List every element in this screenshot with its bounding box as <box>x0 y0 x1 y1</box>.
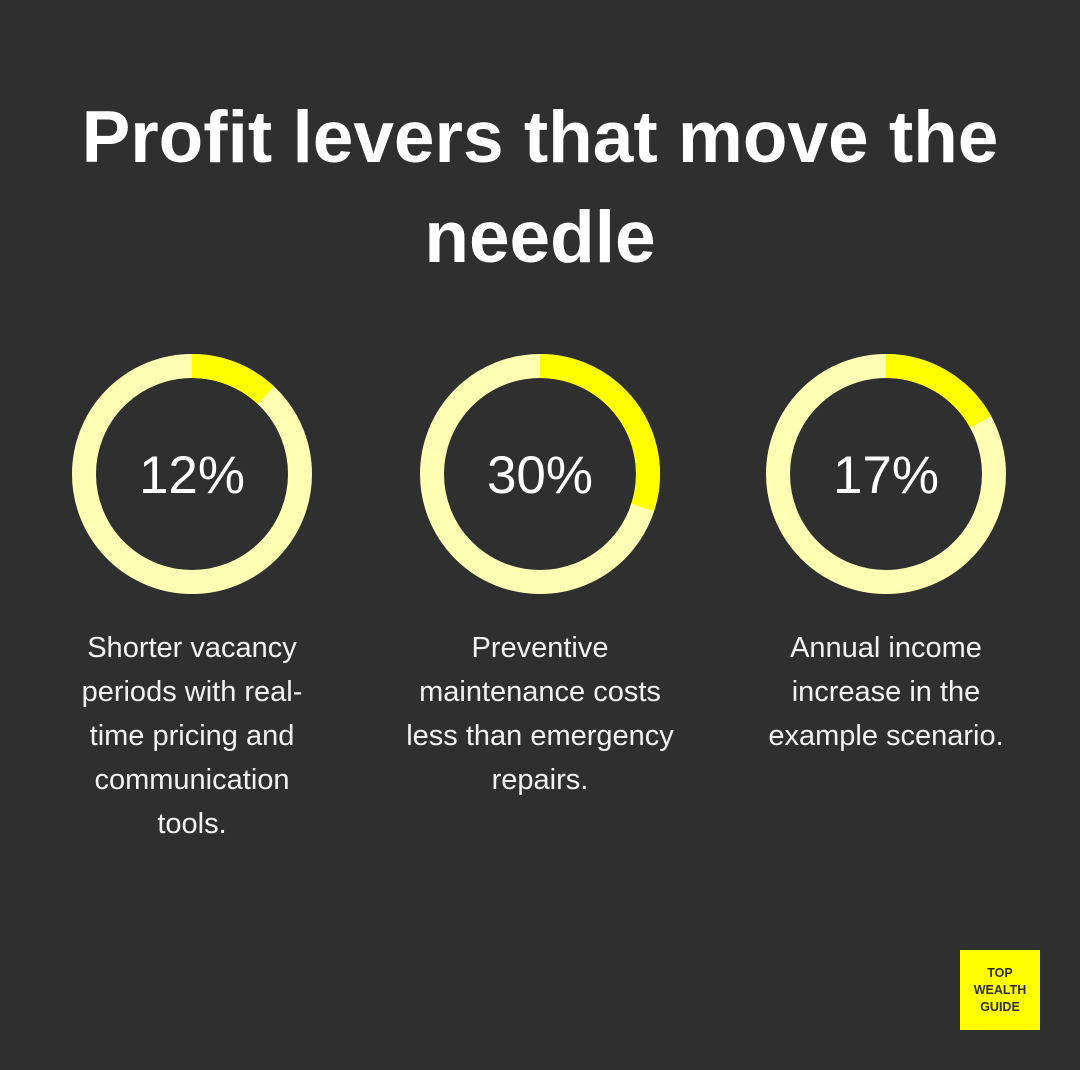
donut charts <box>72 354 1006 594</box>
title <box>82 97 998 278</box>
donut: 17%: 17% <box>833 446 939 505</box>
caption 3: Annual income increase in the example scenario. <box>768 632 1004 752</box>
logo: TOP <box>987 966 1013 980</box>
title: needle <box>424 197 656 278</box>
logo: WEALTH <box>974 982 1026 996</box>
donut: 12% <box>84 366 300 582</box>
donut: 17% <box>778 366 994 582</box>
caption 1: time pricing and communication tools. <box>90 720 294 840</box>
caption 1 <box>82 632 302 840</box>
logo <box>960 950 1040 1030</box>
caption 2: Preventive maintenance costs less than emergency repairs. <box>406 632 674 796</box>
title: Profit levers that move the <box>82 97 998 178</box>
logo: GUIDE <box>980 1000 1020 1014</box>
caption 1: Shorter vacancy periods with real- <box>82 632 302 708</box>
donut: 30%: 30% <box>487 446 593 505</box>
donut: 30% <box>432 366 648 582</box>
donut: 12%: 12% <box>139 446 245 505</box>
